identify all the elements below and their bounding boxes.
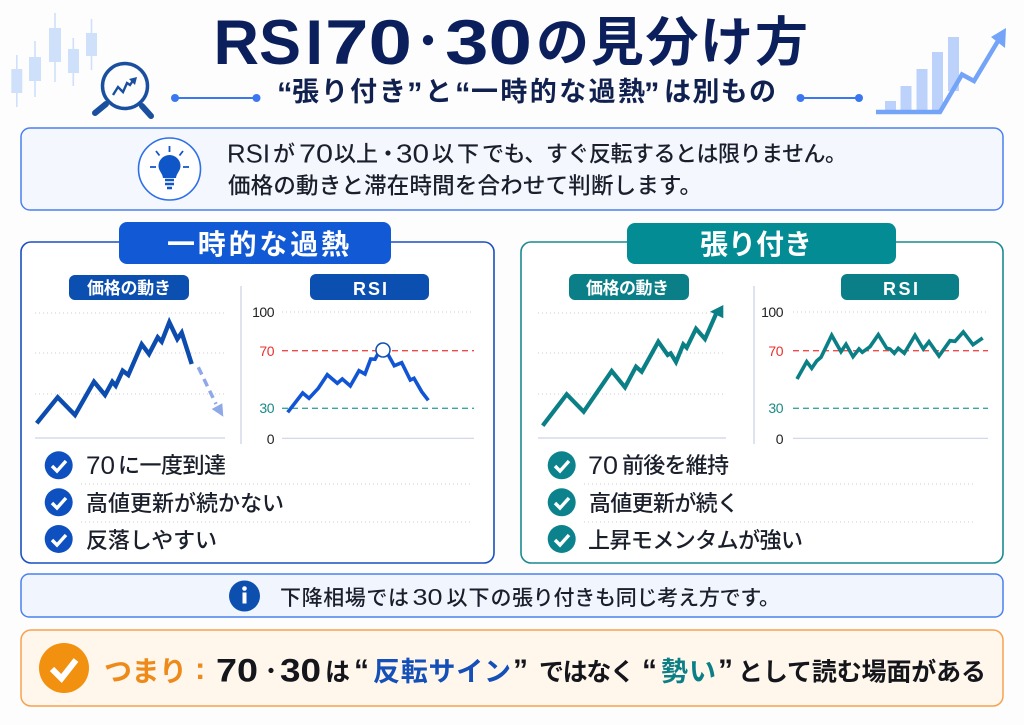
label: price movement: 価格の動き [586,279,669,298]
subtitle: 張り付き [292,77,406,107]
panel: pinned [521,223,1003,563]
text: downtrend note: 下降相場では [280,587,409,610]
text: conclusion: つまり [104,656,187,687]
icon: magnifying glass with chart [95,64,151,116]
text: conclusion: “ [354,654,369,687]
text: conclusion: 反転サイン [373,657,511,687]
item: prone to pullback [45,525,217,553]
text: conclusion: ” [718,654,733,687]
text: intro lines [227,138,847,198]
item: reaches 70 once: 70 [86,452,115,480]
connector: subtitle right [796,94,863,102]
text: conclusion: ” [513,654,528,687]
label: price movement: 価格の動き [87,279,171,298]
text: intro lines: 以下 [432,142,479,166]
label: RSI: RSI [883,279,918,299]
text: downtrend note: 以下の [446,587,512,610]
text: conclusion: 70 [216,652,258,688]
chart: price rising [538,305,726,438]
heading: pinned [627,223,896,264]
list: temporary overheating traits [45,451,470,553]
list: pinned traits [548,451,975,553]
item: stays near 70 [548,451,729,480]
icon: info [229,580,260,612]
title: 70 [325,8,412,78]
text: conclusion: 30 [280,652,321,688]
item: highs continue: 高値更新が続く [589,491,739,516]
text: intro lines: ・ [377,142,399,166]
item: strong upward momentum: 上昇モメンタムが強い [588,528,803,553]
subtitle: 一時的な過熱 [471,77,645,107]
text: conclusion: : [195,651,205,686]
title: 30 [445,8,532,78]
icon: light bulb [138,138,200,200]
title [214,8,808,78]
label: price movement [69,275,189,300]
item: stays near 70: 70 [588,452,618,480]
subtitle [277,76,776,110]
callout: downtrend note [21,574,1003,617]
text: intro lines: 以上 [334,142,378,166]
label: price movement [569,274,689,300]
chart: RSI touches 70 once: 30 [259,400,275,416]
text: conclusion: ・ [261,661,281,683]
subtitle: と [425,77,452,107]
subtitle: は別もの [664,77,776,107]
title: の見分け方 [536,14,808,72]
title: ・ [408,20,448,64]
heading: pinned: 張り付き [700,229,812,260]
chart: RSI staying near 70: 70 [768,343,784,359]
chart: price falling after peak [35,313,225,438]
item: highs do not continue: 高値更新が続かない [86,491,284,516]
subtitle: “ [455,76,470,110]
icon: rising bar chart with arrow [876,28,1006,112]
label: RSI [310,274,429,300]
chart: RSI touches 70 once: 100 [252,304,275,320]
text: downtrend note [280,584,780,610]
text: conclusion: ではなく [539,658,635,686]
text: downtrend note: 張り付きも同じ考え方です。 [512,587,780,610]
panel: intro message [21,128,1003,210]
text: conclusion [104,651,986,688]
chart: RSI staying near 70 [761,304,988,447]
icon: orange check [39,643,89,693]
heading: temporary overheating [119,222,391,264]
item: prone to pullback: 反落しやすい [86,528,217,553]
subtitle: ” [407,76,422,110]
text: intro lines: 70 [299,138,333,168]
item: reaches 70 once [45,451,226,480]
text: intro lines: 価格の動きと滞在時間を合わせて判断します。 [228,174,702,198]
text: intro lines: でも、すぐ反転するとは限りません。 [482,142,847,166]
chart: RSI touches 70 once: 70 [259,343,275,359]
text: conclusion: 勢い [661,657,716,687]
item: reaches 70 once: に一度到達 [118,453,226,478]
chart: RSI touches 70 once: 0 [267,431,275,447]
chart: RSI touches 70 once [252,304,474,447]
label: RSI [841,274,959,300]
subtitle: ” [644,76,660,110]
chart: RSI staying near 70: 100 [761,304,784,320]
item: stays near 70: 前後を維持 [622,453,729,478]
chart: RSI staying near 70: 30 [768,400,784,416]
text: downtrend note: 30 [412,584,442,610]
heading: temporary overheating: 一時的な過熱 [167,229,349,260]
text: conclusion: “ [642,654,657,687]
connector: subtitle left [171,94,260,102]
text: conclusion: は [325,658,350,686]
text: intro lines: が [273,142,295,166]
icon: candlesticks [11,13,97,107]
text: intro lines: RSI [227,138,270,168]
panel: temporary overheating [21,222,494,563]
text: conclusion: として読む場面がある [738,658,986,686]
label: RSI: RSI [353,279,387,299]
title: RSI [214,8,323,78]
panel: conclusion [21,630,1003,706]
subtitle: “ [277,76,292,110]
chart: RSI staying near 70: 0 [776,431,784,447]
text: intro lines: 30 [396,138,429,168]
